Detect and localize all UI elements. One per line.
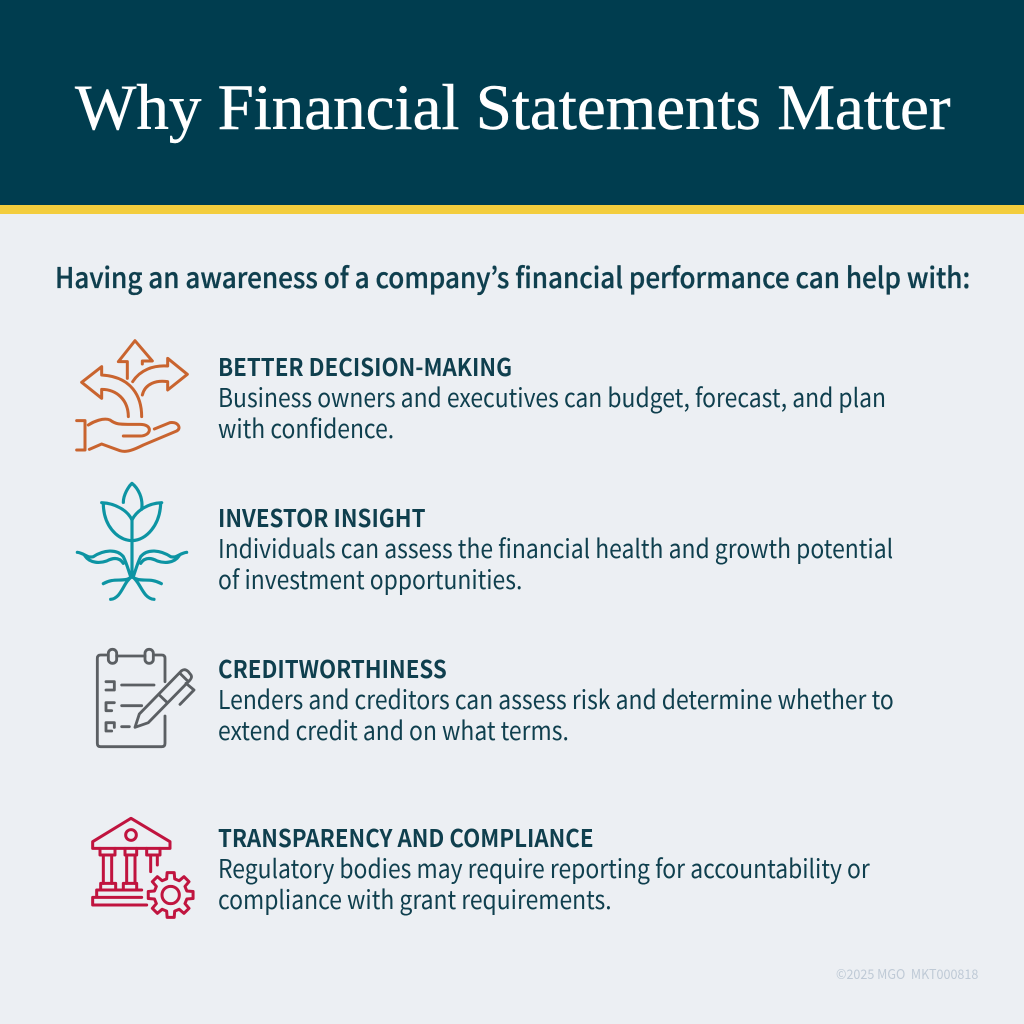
subtitle: Having an awareness of a company’s financial performance can help with: xyxy=(55,256,970,297)
heading: TRANSPARENCY AND COMPLIANCE xyxy=(218,820,594,855)
description line 1: Business owners and executives can budget, forecast, and plan xyxy=(218,378,886,415)
item: better decision-making xyxy=(218,349,886,446)
icon: checklist and pen xyxy=(96,648,196,748)
item: transparency and compliance xyxy=(218,820,870,916)
header band xyxy=(0,0,1024,205)
yellow accent bar xyxy=(0,205,1024,214)
description line 2: extend credit and on what terms. xyxy=(218,710,569,748)
description line 2: of investment opportunities. xyxy=(218,560,522,596)
icon: bank and gear xyxy=(91,816,195,919)
description line 1: Lenders and creditors can assess risk and determine whether to xyxy=(218,680,894,717)
icon: hand with arrows xyxy=(75,339,189,453)
heading: BETTER DECISION-MAKING xyxy=(218,349,512,384)
heading: CREDITWORTHINESS xyxy=(218,651,447,686)
item: creditworthiness xyxy=(218,651,894,748)
description line 1: Regulatory bodies may require reporting for accountability or xyxy=(218,849,870,886)
title: Why Financial Statements Matter xyxy=(75,72,950,144)
description line 1: Individuals can assess the financial health and growth potential xyxy=(218,529,893,566)
heading: INVESTOR INSIGHT xyxy=(218,500,426,535)
copyright note: ©2025 MGO MKT000818 xyxy=(836,963,978,983)
description line 2: with confidence. xyxy=(218,408,394,446)
item: investor insight xyxy=(218,500,893,596)
description line 2: compliance with grant requirements. xyxy=(218,880,612,916)
icon: plant xyxy=(76,482,188,601)
